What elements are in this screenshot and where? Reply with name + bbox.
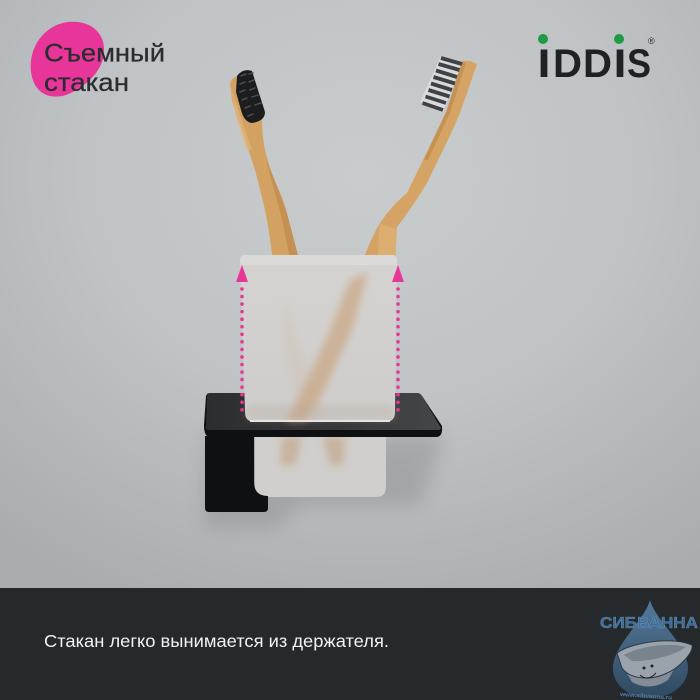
left toothbrush	[230, 70, 300, 263]
right toothbrush	[362, 56, 477, 263]
footer text: Стакан легко вынимается из держателя.	[44, 631, 389, 651]
lower part of glass below holder	[255, 430, 386, 497]
heading	[44, 40, 165, 97]
logo: IDDIS: I	[538, 42, 550, 86]
heading: Съемный	[44, 40, 165, 68]
shadow of holder on wall	[205, 435, 445, 528]
heading: стакан	[44, 69, 129, 97]
holder plate	[204, 393, 442, 437]
footer band	[0, 588, 700, 700]
left arrow	[236, 265, 248, 412]
logo: IDDIS: D	[583, 42, 612, 86]
logo: IDDIS: I	[614, 42, 626, 86]
logo: IDDIS: S	[627, 42, 651, 86]
watermark logo: Сибванна	[600, 600, 698, 700]
logo: IDDIS: D	[553, 42, 582, 86]
frosted glass	[240, 255, 397, 422]
logo: IDDIS	[538, 34, 655, 86]
pink blob	[31, 22, 104, 97]
right arrow	[392, 265, 404, 412]
logo: IDDIS: ®	[648, 36, 655, 46]
wall mount	[205, 436, 268, 512]
watermark logo: Сибванна: СИБВАННА	[600, 615, 698, 632]
